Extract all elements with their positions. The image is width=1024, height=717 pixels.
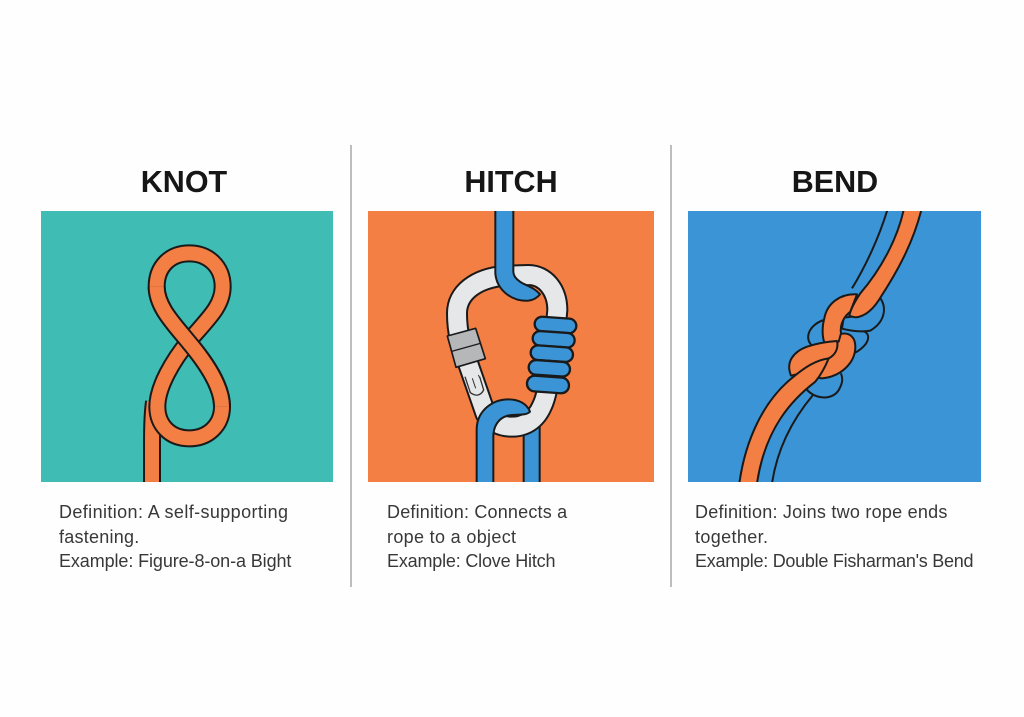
icon: top rope	[495, 210, 540, 301]
text: bend definition: Example: Double Fisharman's Bend	[695, 551, 973, 571]
text: hitch definition: Definition: Connects a	[387, 502, 567, 522]
knot: lower strand segment	[812, 334, 855, 378]
text: bend definition	[695, 502, 973, 571]
text: knot definition: Example: Figure-8-on-a Bight	[59, 551, 291, 571]
text: knot definition: fastening.	[59, 526, 139, 546]
icon: carabiner	[447, 275, 557, 427]
icon: figure-8 rope	[152, 253, 223, 483]
text: hitch definition: rope to a object	[387, 526, 516, 546]
divider: right	[670, 145, 672, 587]
text: knot definition: Definition: A self-supporting	[59, 502, 288, 522]
icon: orange double fisherman's knot	[739, 210, 921, 483]
icon: lower left rope	[477, 399, 530, 483]
knot: upper rope	[849, 210, 921, 317]
divider: left	[350, 145, 352, 587]
text: hitch definition: Example: Clove Hitch	[387, 551, 555, 571]
panel: bend illustration	[688, 211, 981, 482]
knot: left loop	[789, 341, 837, 376]
text: hitch definition	[387, 502, 568, 571]
heading: BEND: BEND	[792, 165, 878, 199]
icon: clove hitch coils	[526, 316, 577, 394]
knot: upper strand segment	[823, 294, 857, 343]
text: bend definition: Definition: Joins two rope ends	[695, 502, 948, 522]
text: bend definition: together.	[695, 526, 768, 546]
icon: blue rope outline	[772, 210, 887, 483]
gate latch	[465, 377, 484, 395]
heading: HITCH: HITCH	[464, 165, 558, 199]
icon: lower right rope strand	[505, 423, 559, 483]
heading: KNOT: KNOT	[141, 165, 227, 199]
panel: knot illustration	[41, 211, 333, 482]
text: knot definition	[59, 502, 292, 571]
panel: hitch illustration	[368, 211, 654, 482]
knot: lower rope	[739, 358, 829, 483]
gate sleeve	[447, 328, 485, 367]
